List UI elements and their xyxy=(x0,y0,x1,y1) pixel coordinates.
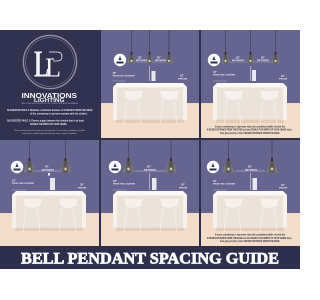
pendant lamps xyxy=(223,140,278,172)
spacing labels: 30" xyxy=(157,56,161,59)
spacing labels: BETWEEN xyxy=(245,170,258,172)
note text: If your countertop is narrower than the combined width of both the xyxy=(215,124,285,128)
spacing labels: FROM xyxy=(279,78,287,80)
spacing labels xyxy=(113,166,187,190)
note text: then give priority to the 6 INCHES DISTANCE FROM THE EDGE. xyxy=(220,239,280,243)
spacing labels: BETWEEN xyxy=(144,170,157,172)
rule 1 xyxy=(7,108,93,116)
spacing labels: 18" xyxy=(80,184,84,186)
spacing labels xyxy=(213,56,287,81)
spacing labels: FROM THE COUNTER xyxy=(112,75,135,77)
rule 2: DOUBLE THE WIDTH OF YOUR SHADE. xyxy=(30,122,67,126)
spacing labels: FROM xyxy=(179,188,187,190)
spacing labels: BETWEEN xyxy=(257,60,270,62)
pendant lamps xyxy=(24,140,71,172)
spacing labels: FROM THE COUNTER xyxy=(113,184,136,186)
spacing labels: 30" xyxy=(147,166,151,168)
counter with stools xyxy=(213,83,287,124)
icon: badge xyxy=(207,161,219,173)
footnote: consult with a qualified professional for your home's specific installation. xyxy=(22,132,77,135)
spacing labels: FROM THE COUNTER xyxy=(213,184,236,186)
panel: two pendants, bottom left xyxy=(0,140,99,246)
icon: badge xyxy=(208,54,220,66)
counter with stools xyxy=(12,191,86,232)
panel: two pendants, bottom middle xyxy=(101,140,199,246)
spacing labels: FROM THE COUNTER xyxy=(213,74,236,76)
spacing labels: BETWEEN xyxy=(155,60,167,62)
spacing labels: 18" xyxy=(213,180,217,183)
note text xyxy=(207,232,292,243)
icon: badge xyxy=(109,161,121,173)
brand name: INNOVATIONS xyxy=(22,91,77,100)
spacing labels: 18" xyxy=(180,74,184,78)
spacing labels: 24" xyxy=(45,166,49,168)
spacing labels: BETWEEN xyxy=(136,60,148,62)
spacing labels xyxy=(12,166,86,190)
spacing labels: 36" xyxy=(248,166,252,168)
title: BELL PENDANT SPACING GUIDE xyxy=(21,250,279,268)
spacing labels: 18" xyxy=(213,71,217,74)
footnote xyxy=(14,129,85,135)
rule 2: SUGGESTED RULE 2: Ensure a gap between the shades that is at least xyxy=(7,118,84,122)
spacing labels: 18" xyxy=(112,72,116,75)
panel: logo and rules xyxy=(0,30,100,139)
spacing labels xyxy=(112,56,188,81)
spacing labels: 36" xyxy=(236,56,240,59)
icon: badge xyxy=(11,161,23,173)
counter with stools xyxy=(213,191,287,232)
icon: badge xyxy=(114,54,126,66)
pendant lamps xyxy=(128,30,173,63)
rule 2 xyxy=(7,118,84,126)
spacing labels: 18" xyxy=(113,180,117,183)
spacing labels: FROM xyxy=(78,188,86,190)
pendant lamps xyxy=(222,30,280,63)
spacing labels: BETWEEN xyxy=(232,60,245,62)
spacing labels: FROM xyxy=(279,188,287,190)
panel: three pendants, top right xyxy=(201,30,300,138)
tagline: THE LIGHTING EXPERTS FOR YOUR HOME AND BUSINESS xyxy=(21,102,79,105)
brand sub-name: LIGHTING xyxy=(34,98,65,104)
footnote: These are design tips and rules for your spacing needs. Your situation or installation may differ xyxy=(14,129,85,132)
logo monogram: L xyxy=(45,52,61,82)
spacing labels: 18" xyxy=(281,184,285,187)
rule 1: of the countertop to prevent contact with the shades. xyxy=(30,112,88,116)
spacing labels: 18" xyxy=(12,180,16,182)
rule 1: SUGGESTED RULE 1: Maintain a minimum distance of 6 INCHES FROM THE EDGE xyxy=(7,108,93,112)
spacing labels xyxy=(213,166,287,190)
logo monogram: L xyxy=(34,44,49,86)
counter with stools xyxy=(113,83,187,124)
spacing labels: 18" xyxy=(181,184,185,186)
spacing labels: 30" xyxy=(138,56,142,59)
spacing labels: FROM xyxy=(178,78,188,80)
panel: two pendants, bottom right xyxy=(201,140,300,246)
spacing labels: 18" xyxy=(281,75,285,78)
pendant lamps xyxy=(123,140,176,172)
spacing labels: 36" xyxy=(261,56,265,59)
background band xyxy=(0,30,300,269)
logo ring xyxy=(23,35,77,89)
note text: If your countertop is narrower than the combined width of both the xyxy=(215,232,285,236)
panel: three pendants, top middle xyxy=(101,30,199,138)
spacing labels: BETWEEN xyxy=(42,170,55,172)
note text xyxy=(207,124,292,135)
spacing labels: FROM THE COUNTER xyxy=(12,183,35,185)
note text: then give priority to the 6 INCHES DISTANCE FROM THE EDGE. xyxy=(220,131,280,135)
counter with stools xyxy=(113,191,187,232)
